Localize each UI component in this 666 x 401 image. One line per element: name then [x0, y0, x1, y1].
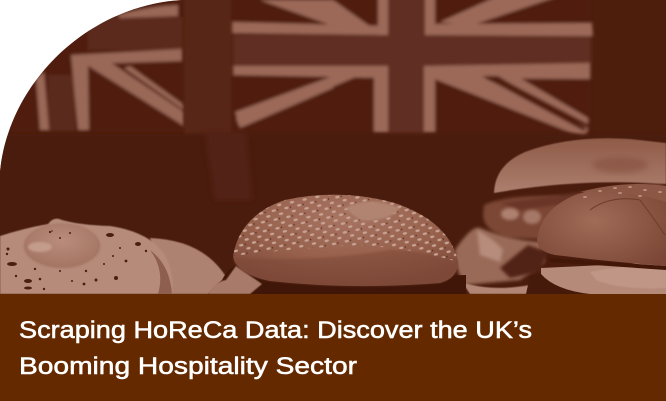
front bun seeds [583, 186, 662, 198]
title: Booming Hospitality Sector [19, 353, 357, 380]
left flag [0, 0, 184, 132]
plate [150, 238, 228, 294]
main union flag [232, 0, 593, 138]
title: Scraping HoReCa Data: Discover the UK’s [19, 317, 532, 344]
front burger [526, 184, 666, 294]
title panel [0, 294, 666, 401]
title [19, 317, 532, 380]
hero photo: flags and burgers [0, 0, 666, 299]
back burger [455, 138, 666, 294]
wooden table [0, 132, 589, 172]
wooden post [184, 0, 232, 135]
fried egg [0, 219, 173, 294]
photo background wall [0, 0, 666, 172]
back bun [494, 138, 666, 193]
centre burger [208, 195, 466, 294]
sesame seeds [233, 195, 458, 265]
pepper speckles [6, 230, 147, 290]
burger filling [482, 194, 560, 240]
